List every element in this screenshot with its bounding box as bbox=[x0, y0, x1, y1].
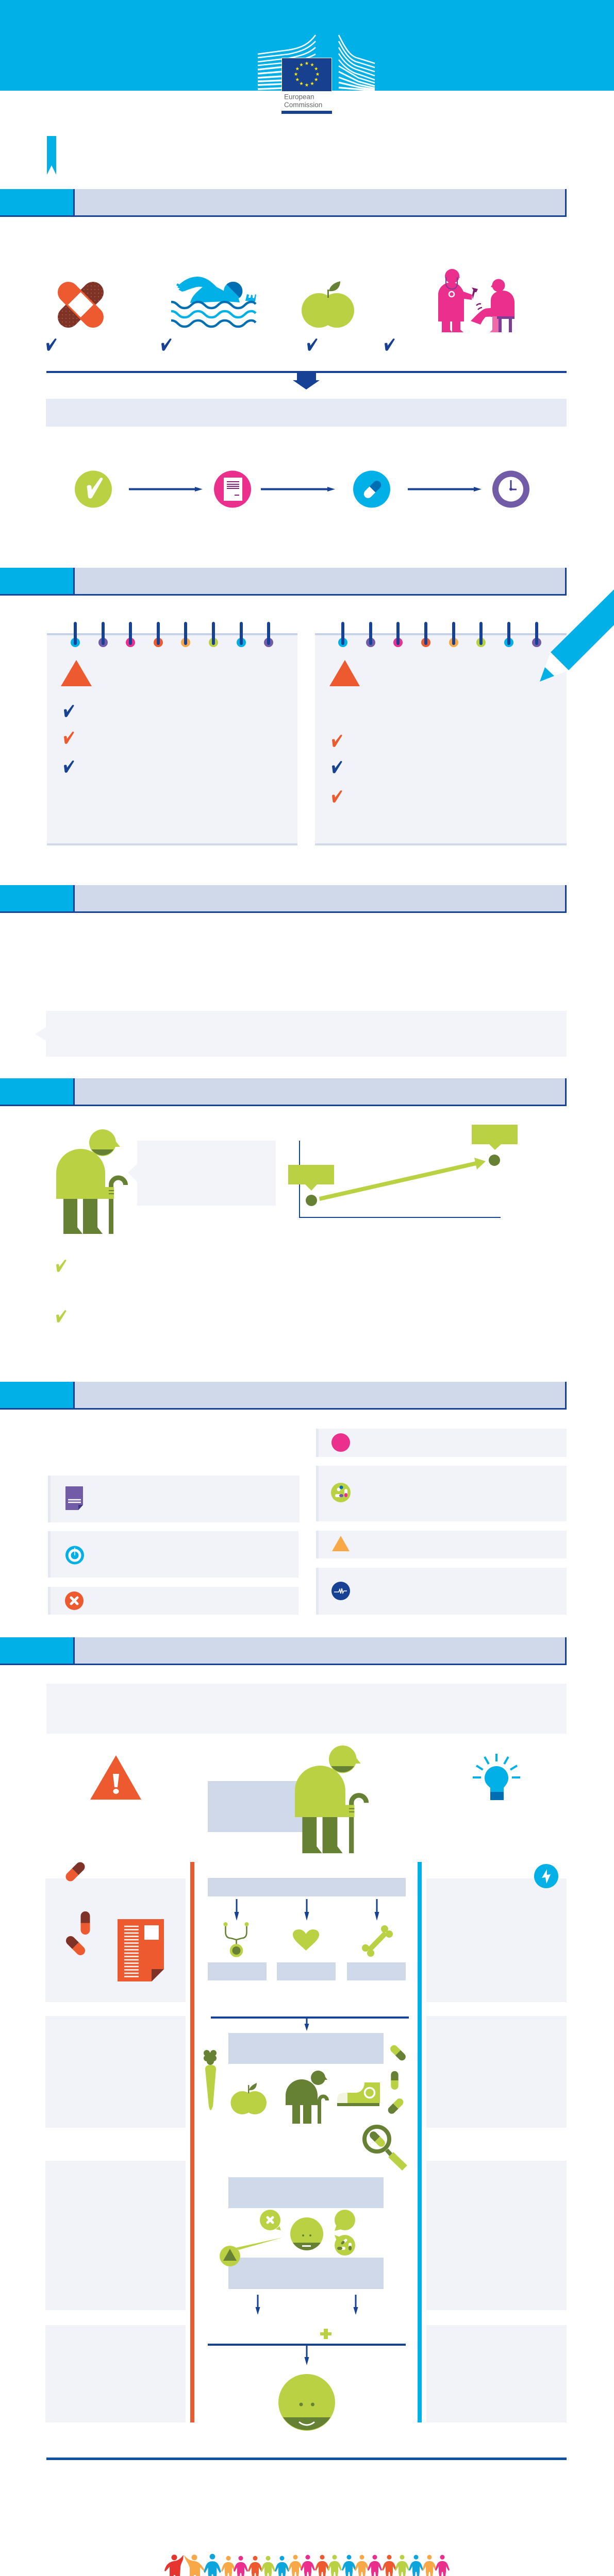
card: stop bbox=[48, 1587, 298, 1615]
icon: pills bbox=[331, 1483, 351, 1502]
icon: cross bbox=[65, 1591, 84, 1610]
section header 1 bbox=[0, 189, 567, 217]
trend arrow bbox=[319, 1158, 486, 1201]
speech box bbox=[128, 1141, 276, 1206]
icon: capsule vertical bbox=[80, 1911, 90, 1935]
card: magenta bbox=[316, 1429, 567, 1457]
person raised arm red bbox=[164, 2554, 184, 2576]
card: document bbox=[48, 1476, 300, 1522]
spiral binding bbox=[71, 623, 273, 647]
icon: carrot bbox=[204, 2050, 217, 2110]
panel: notebook left bbox=[47, 623, 297, 845]
arrow bbox=[261, 487, 335, 492]
card: pills bbox=[316, 1466, 567, 1521]
checkmark 3 bbox=[307, 338, 318, 351]
end point bbox=[489, 1155, 500, 1166]
icon: bone bbox=[362, 1925, 393, 1957]
logo wordmark: European bbox=[284, 93, 314, 101]
step: clock bbox=[492, 471, 529, 508]
section header 2 bbox=[0, 568, 567, 596]
check bbox=[332, 735, 342, 747]
icon: capsule diagonal bbox=[64, 1934, 87, 1957]
arrow bbox=[304, 1899, 309, 1921]
card: power bbox=[48, 1531, 298, 1578]
icon: triangle bbox=[332, 1536, 350, 1551]
check bbox=[332, 761, 342, 773]
logo bar bbox=[281, 111, 332, 114]
intro box bbox=[46, 1684, 567, 1734]
label box bbox=[277, 1962, 336, 1980]
icon: walking figure bbox=[286, 2071, 327, 2124]
warning triangle bbox=[61, 660, 92, 686]
callout end bbox=[472, 1125, 518, 1150]
rule with down arrow bbox=[46, 371, 567, 389]
label box bbox=[228, 2177, 384, 2208]
logo wordmark second line: Commission bbox=[284, 101, 322, 109]
icon: magnifier bbox=[364, 2127, 405, 2168]
icon: heart bbox=[293, 1929, 319, 1951]
card: pulse bbox=[316, 1568, 567, 1615]
check bbox=[56, 1260, 67, 1272]
icon: light bulb bbox=[473, 1754, 520, 1800]
label box bbox=[228, 2033, 384, 2064]
step: check bbox=[75, 471, 112, 508]
left panel 1 bbox=[45, 1878, 186, 2002]
icon: magenta dot bbox=[331, 1433, 350, 1452]
icon: power bbox=[65, 1546, 84, 1564]
label box bbox=[228, 2258, 384, 2289]
spiral binding bbox=[338, 623, 541, 647]
logo: European Commission bbox=[258, 35, 375, 114]
icon: lightning bbox=[534, 1864, 558, 1888]
left panel 3 bbox=[45, 2161, 186, 2310]
warning triangle bbox=[329, 660, 360, 686]
checkmark 2 bbox=[161, 338, 172, 351]
label box bbox=[208, 1962, 267, 1980]
section header 6 bbox=[0, 1637, 567, 1665]
icon: stethoscope bbox=[224, 1922, 248, 1957]
icon: shoe bbox=[337, 2082, 380, 2106]
icon: report document bbox=[118, 1919, 164, 1981]
divider: blue bbox=[418, 1862, 422, 2422]
bubble: empty bbox=[335, 2210, 355, 2231]
check bbox=[332, 790, 342, 803]
label box bbox=[347, 1962, 406, 1980]
icon: plus bbox=[320, 2329, 331, 2339]
check bbox=[64, 760, 74, 773]
icon: document bbox=[65, 1486, 83, 1510]
icon: doctor and patient bbox=[438, 269, 515, 332]
bubble: triangle bbox=[220, 2238, 283, 2266]
logo building right wing bbox=[339, 35, 375, 91]
arrow bbox=[374, 1899, 379, 1921]
right panel 3 bbox=[426, 2161, 567, 2310]
icon: old man with cane bbox=[56, 1129, 126, 1234]
icon: pencil bbox=[540, 589, 614, 682]
check bbox=[64, 732, 74, 744]
divider: orange bbox=[190, 1862, 194, 2422]
icon: apple bbox=[302, 281, 354, 328]
bubble: pills bbox=[335, 2235, 355, 2256]
rule with arrow bbox=[211, 2016, 409, 2031]
start point bbox=[306, 1195, 317, 1206]
logo building left wing bbox=[258, 35, 316, 89]
left panel 2 bbox=[45, 2016, 186, 2128]
step: pill bbox=[353, 471, 390, 508]
check bbox=[56, 1310, 67, 1323]
icon: swimmer bbox=[171, 277, 256, 327]
bottom rule bbox=[46, 2458, 567, 2460]
checkmark 1 bbox=[46, 338, 57, 351]
card: triangle bbox=[316, 1531, 567, 1558]
icon: warning bbox=[90, 1755, 141, 1800]
arrow bbox=[408, 487, 482, 492]
right panel 1 bbox=[426, 1878, 567, 2002]
process flow bbox=[75, 471, 529, 508]
arrow bbox=[256, 2295, 260, 2315]
callout start bbox=[288, 1165, 334, 1191]
section header 5 bbox=[0, 1382, 567, 1410]
icon: capsule top bbox=[64, 1860, 87, 1883]
axes bbox=[300, 1141, 501, 1217]
icon: pulse bbox=[331, 1582, 350, 1600]
right panel 4 bbox=[426, 2325, 567, 2422]
step: document bbox=[214, 471, 251, 508]
title ribbon bbox=[47, 136, 56, 175]
chart: progression line bbox=[288, 1125, 518, 1217]
EU flag bbox=[281, 58, 332, 91]
left panel 4 bbox=[45, 2325, 186, 2422]
top banner bbox=[0, 0, 614, 91]
label bar: body systems bbox=[208, 1878, 406, 1896]
section header 4 bbox=[0, 1078, 567, 1106]
checkmark 4 bbox=[385, 338, 395, 351]
summary box bbox=[46, 399, 567, 427]
icon: capsule bbox=[391, 2071, 399, 2090]
icon: capsule bbox=[387, 2097, 405, 2115]
people chain bbox=[164, 2554, 450, 2576]
row of people bbox=[204, 2554, 450, 2576]
icon: old man large bbox=[295, 1745, 367, 1853]
panel: notebook right bbox=[315, 623, 567, 845]
check bbox=[64, 705, 74, 717]
callout box bbox=[35, 1011, 567, 1057]
center label box bbox=[208, 1781, 309, 1832]
rule with arrow bbox=[208, 2344, 406, 2365]
icon: bandage bbox=[68, 292, 93, 317]
icon: happy face bbox=[278, 2374, 335, 2431]
icon: capsule bbox=[389, 2044, 407, 2062]
arrow bbox=[234, 1899, 239, 1921]
section header 3 bbox=[0, 885, 567, 913]
bubble: cross bbox=[260, 2210, 281, 2230]
arrow bbox=[129, 487, 203, 492]
icon: neutral face bbox=[290, 2217, 323, 2250]
right panel 2 bbox=[426, 2016, 567, 2128]
arrow bbox=[354, 2295, 358, 2315]
icon: apple small bbox=[231, 2083, 267, 2114]
person raised arm orange bbox=[184, 2554, 205, 2576]
